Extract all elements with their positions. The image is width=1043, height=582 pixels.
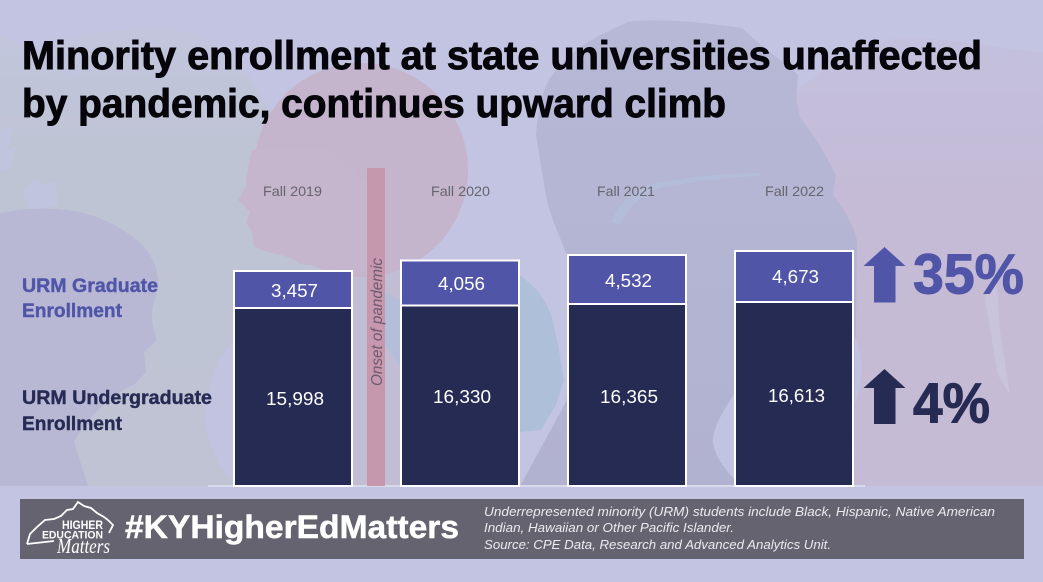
silhouette: pink profile head bbox=[238, 150, 385, 272]
bar: Fall 2020: 16,330 bbox=[433, 387, 491, 407]
title: by pandemic, continues upward climb bbox=[22, 82, 726, 126]
year labels: Fall 2022 bbox=[765, 183, 824, 199]
footnote: Indian, Hawaiian or Other Pacific Islander. bbox=[484, 520, 734, 535]
silhouette: left child profile bbox=[0, 208, 158, 486]
silhouette: right person bbox=[790, 38, 1043, 486]
footer band bbox=[20, 499, 1024, 559]
logo: Higher Education Matters: HIGHER bbox=[62, 518, 103, 532]
eyeglass arm on centre person bbox=[611, 173, 760, 225]
axis baseline bbox=[208, 485, 865, 487]
bar: Fall 2020 bbox=[401, 260, 519, 486]
footnote bbox=[484, 504, 995, 552]
silhouette: small blue head bbox=[519, 275, 564, 432]
bar: Fall 2019: 3,457 bbox=[271, 281, 318, 301]
row label: undergraduate: Enrollment bbox=[22, 413, 122, 435]
year labels: Fall 2019 bbox=[263, 183, 322, 199]
row label: undergraduate: URM Undergraduate bbox=[22, 387, 212, 409]
stat: undergraduate change: 4% bbox=[913, 372, 990, 436]
logo: Higher Education Matters: EDUCATION bbox=[42, 530, 103, 542]
row label: undergraduate bbox=[22, 387, 212, 435]
footnote: Underrepresented minority (URM) students include Black, Hispanic, Native American bbox=[484, 504, 995, 519]
lilac lower body of left person near the pandemic band bbox=[353, 262, 400, 486]
stat: graduate change: 35% bbox=[913, 242, 1024, 306]
row label: graduate bbox=[22, 275, 158, 322]
bar: Fall 2022: 4,673 bbox=[772, 267, 819, 287]
bar: Fall 2019: 15,998 bbox=[266, 389, 324, 409]
logo: Higher Education Matters bbox=[27, 502, 113, 558]
icon: graduate up arrow bbox=[864, 247, 906, 302]
hair highlights on left person bbox=[0, 52, 80, 210]
bar: Fall 2021: 16,365 bbox=[600, 387, 658, 407]
silhouette: left person with leafy hair bbox=[0, 26, 400, 486]
silhouette: centre person bbox=[520, 20, 857, 486]
bar: Fall 2021 bbox=[568, 255, 686, 486]
onset of pandemic band bbox=[367, 168, 386, 486]
onset of pandemic band: Onset of pandemic bbox=[369, 258, 386, 386]
logo: Higher Education Matters: Matters bbox=[56, 534, 110, 558]
bar: Fall 2021: 4,532 bbox=[605, 271, 652, 291]
bar: Fall 2022: 16,613 bbox=[768, 386, 825, 406]
lavender shape beside first bar bbox=[205, 340, 234, 482]
row label: graduate: URM Graduate bbox=[22, 275, 158, 297]
blue fern behind pandemic band bbox=[385, 293, 400, 366]
bar: Fall 2022 bbox=[735, 251, 853, 486]
title: Minority enrollment at state universities unaffected bbox=[22, 34, 982, 78]
lavender gap between last bars bbox=[713, 393, 735, 480]
row label: graduate: Enrollment bbox=[22, 300, 122, 322]
bar: Fall 2020: 4,056 bbox=[438, 274, 485, 294]
lavender gap beside last bar bbox=[855, 338, 861, 405]
silhouette: pink circle behind head bbox=[254, 63, 468, 277]
year labels bbox=[263, 183, 824, 199]
hashtag: #KYHigherEdMatters bbox=[125, 509, 459, 545]
footnote: Source: CPE Data, Research and Advanced Analytics Unit. bbox=[484, 537, 831, 552]
lavender streak on right person bbox=[985, 262, 1010, 395]
year labels: Fall 2020 bbox=[431, 183, 490, 199]
icon: undergraduate up arrow bbox=[864, 369, 906, 424]
year labels: Fall 2021 bbox=[597, 183, 655, 199]
title bbox=[22, 34, 982, 126]
bar: Fall 2019 bbox=[234, 271, 352, 486]
